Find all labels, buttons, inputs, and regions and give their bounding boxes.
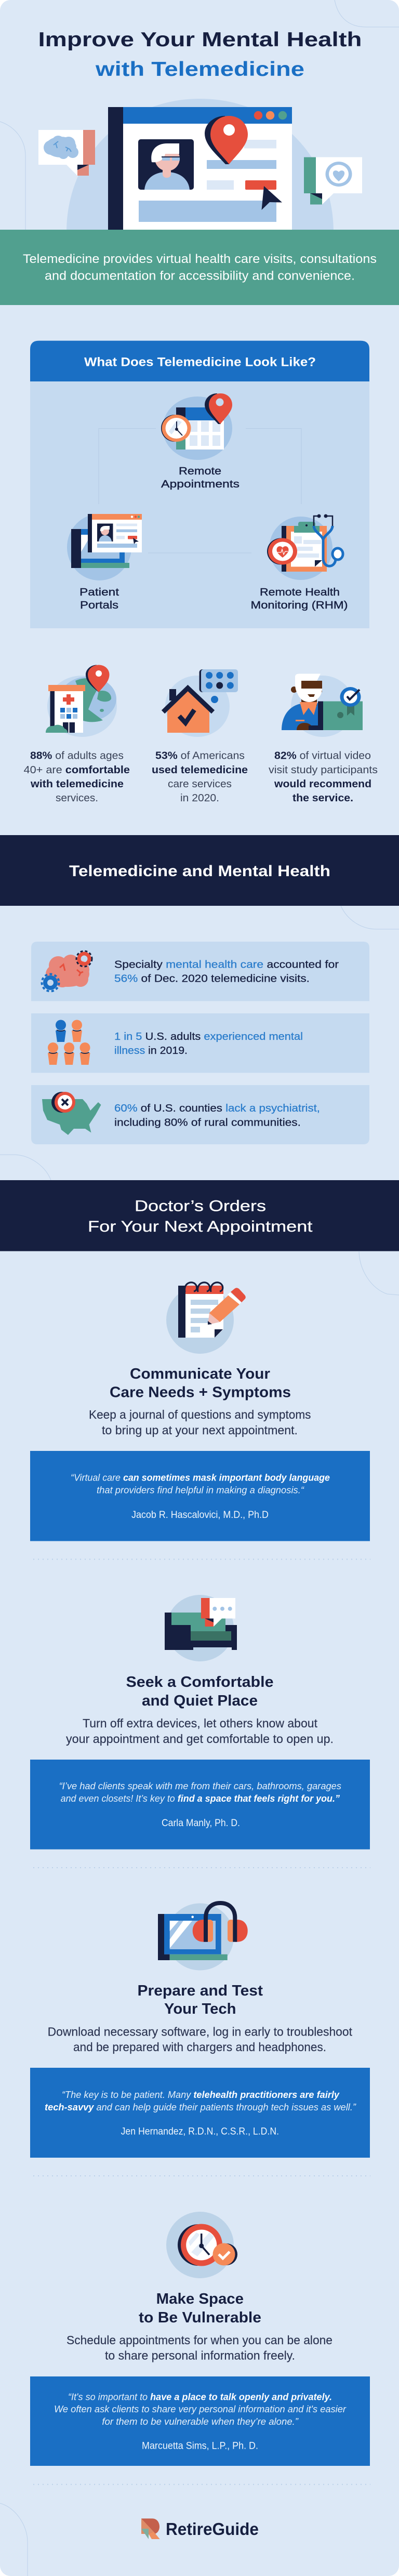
label: patient portals: Patient (79, 587, 119, 598)
panel: 60 percent of counties (31, 1085, 369, 1144)
stat: 53 percent: care services (168, 778, 232, 790)
title: with Telemedicine (95, 58, 304, 81)
step 3 text (48, 2025, 353, 2054)
label: remote health monitoring: Monitoring (RHM) (250, 600, 348, 611)
icon: hospital and globe (46, 665, 117, 737)
stat: 88 percent: with telemedicine (30, 778, 124, 790)
stat: 88 percent: services. (56, 792, 98, 804)
stat: 88 percent (24, 750, 130, 804)
icon: brain and gears (42, 951, 92, 992)
step 1 heading: Communicate Your (130, 1366, 270, 1382)
label: remote health monitoring: Remote Health (260, 587, 340, 598)
stat: 88 percent: 88% of adults ages (30, 750, 124, 762)
stat: 82 percent: visit study participants (269, 764, 378, 776)
step 1 heading (110, 1366, 291, 1401)
step 4 heading (139, 2291, 261, 2326)
label: patient portals (79, 587, 119, 611)
step 2 text (66, 1716, 334, 1746)
step 2 heading (126, 1674, 273, 1709)
quote box 2: “I’ve had clients speak with me from their cars, bathrooms, garages (59, 1780, 341, 1791)
icon: laptop and headphones (158, 1903, 250, 1971)
icon: heart speech bubble (304, 157, 362, 205)
quote box 4 (30, 2376, 370, 2466)
quote box 2: and even closets! It’s key to find a space that feels right for you.” (61, 1793, 340, 1804)
icon: us map with marker (42, 1092, 101, 1135)
intro band (0, 230, 399, 305)
stat: 82 percent: would recommend (274, 778, 371, 790)
step 1 text: Keep a journal of questions and symptoms (89, 1408, 311, 1421)
stat text: Specialty mental health care accounted for (114, 958, 339, 971)
stat: 88 percent: 40+ are comfortable (24, 764, 130, 776)
title: Improve Your Mental Health (38, 29, 362, 51)
icon: remote health monitoring (267, 514, 343, 580)
quote box 4: for them to be vulnerable when they’re alone.” (102, 2416, 299, 2427)
icon: doctor with video call (282, 673, 363, 737)
icon: brain speech bubble (38, 130, 95, 176)
step 2 text: Turn off extra devices, let others know about (83, 1716, 318, 1730)
quote box 1: Jacob R. Hascalovici, M.D., Ph.D (131, 1510, 269, 1521)
section banner: doctor's orders: Doctor’s Orders (135, 1197, 266, 1215)
hero illustration: telemedicine browser window (66, 99, 334, 232)
label: remote appointments (161, 466, 240, 490)
stat: 82 percent: the service. (292, 792, 353, 804)
quote box 3: Jen Hernandez, R.D.N., C.S.R., L.D.N. (121, 2126, 279, 2137)
stat: 53 percent (152, 750, 248, 804)
quote box 3 (30, 2068, 370, 2158)
step 2 text: your appointment and get comfortable to open up. (66, 1732, 334, 1746)
stat: 53 percent: 53% of Americans (155, 750, 245, 762)
stat text (114, 958, 339, 985)
step 4 text: to share personal information freely. (105, 2349, 295, 2362)
quote box 1 (30, 1451, 370, 1541)
label: remote appointments: Remote (179, 466, 221, 477)
step 4 text (66, 2333, 332, 2362)
quote box 1: “Virtual care can sometimes mask important body language (71, 1472, 330, 1483)
stat text: including 80% of rural communities. (114, 1116, 301, 1128)
icon: couch with speech bubble (165, 1595, 237, 1661)
quote box 2: Carla Manly, Ph. D. (162, 1818, 240, 1829)
section banner: doctor's orders: For Your Next Appointment (88, 1218, 313, 1235)
quote box 4: Marcuetta Sims, L.P., Ph. D. (142, 2441, 258, 2452)
panel: specialty mental health care (31, 942, 369, 1001)
label: patient portals: Portals (80, 600, 118, 611)
logo: RetireGuide: RetireGuide (166, 2519, 259, 2539)
step 3 heading: Prepare and Test (137, 1983, 263, 1999)
stat: 82 percent (269, 750, 378, 804)
quote box 3: “The key is to be patient. Many telehealth practitioners are fairly (62, 2089, 340, 2100)
quote box 3: tech-savvy and can help guide their patients through tech issues as well.” (45, 2102, 356, 2112)
stat: 53 percent: used telemedicine (152, 764, 248, 776)
icon: clock with check badge (166, 2212, 237, 2278)
icon: home with check (163, 669, 238, 737)
stat: 53 percent: in 2020. (180, 792, 219, 804)
quote box 1: that providers find helpful in making a diagnosis.“ (97, 1484, 304, 1495)
label: remote health monitoring (250, 587, 348, 611)
step 3 heading (137, 1983, 263, 2017)
section banner: telemedicine and mental health (0, 835, 399, 906)
icon: notepad and pencil (166, 1283, 246, 1354)
section banner: telemedicine and mental health: Telemedicine and Mental Health (69, 863, 330, 880)
panel: what does telemedicine look like (30, 341, 369, 628)
step 2 heading: and Quiet Place (142, 1693, 258, 1709)
step 3 text: and be prepared with chargers and headphones. (73, 2040, 326, 2054)
step 4 text: Schedule appointments for when you can be alone (66, 2333, 332, 2347)
step 1 text (89, 1408, 311, 1437)
panel: 1 in 5 adults (31, 1013, 369, 1073)
step 1 heading: Care Needs + Symptoms (110, 1384, 291, 1401)
label: remote appointments: Appointments (161, 479, 240, 490)
quote box 2 (30, 1760, 370, 1850)
step 4 heading: to Be Vulnerable (139, 2309, 261, 2326)
section banner: doctor's orders (0, 1180, 399, 1251)
step 1 text: to bring up at your next appointment. (102, 1423, 298, 1437)
step 3 text: Download necessary software, log in early to troubleshoot (48, 2025, 353, 2039)
step 4 heading: Make Space (156, 2291, 244, 2307)
intro band: Telemedicine provides virtual health care visits, consultations (23, 252, 377, 266)
quote box 4: We often ask clients to share very personal information and it's easier (54, 2403, 347, 2414)
stat text (114, 1102, 320, 1128)
stat text: 60% of U.S. counties lack a psychiatrist, (114, 1102, 320, 1114)
step 3 heading: Your Tech (164, 2001, 236, 2017)
stat text: illness in 2019. (114, 1045, 188, 1056)
stat text: 1 in 5 U.S. adults experienced mental (114, 1031, 303, 1042)
stat text: 56% of Dec. 2020 telemedicine visits. (114, 973, 310, 985)
quote box 4: “It's so important to have a place to talk openly and privately. (68, 2392, 332, 2402)
icon: remote appointments calendar (161, 393, 232, 460)
stat text (114, 1031, 303, 1056)
stat: 82 percent: 82% of virtual video (274, 750, 371, 762)
step 2 heading: Seek a Comfortable (126, 1674, 273, 1690)
title (38, 29, 362, 81)
icon: five people (48, 1020, 90, 1065)
intro band: and documentation for accessibility and convenience. (45, 269, 355, 283)
panel heading: What Does Telemedicine Look Like? (84, 355, 316, 369)
icon: patient portals (67, 514, 142, 580)
